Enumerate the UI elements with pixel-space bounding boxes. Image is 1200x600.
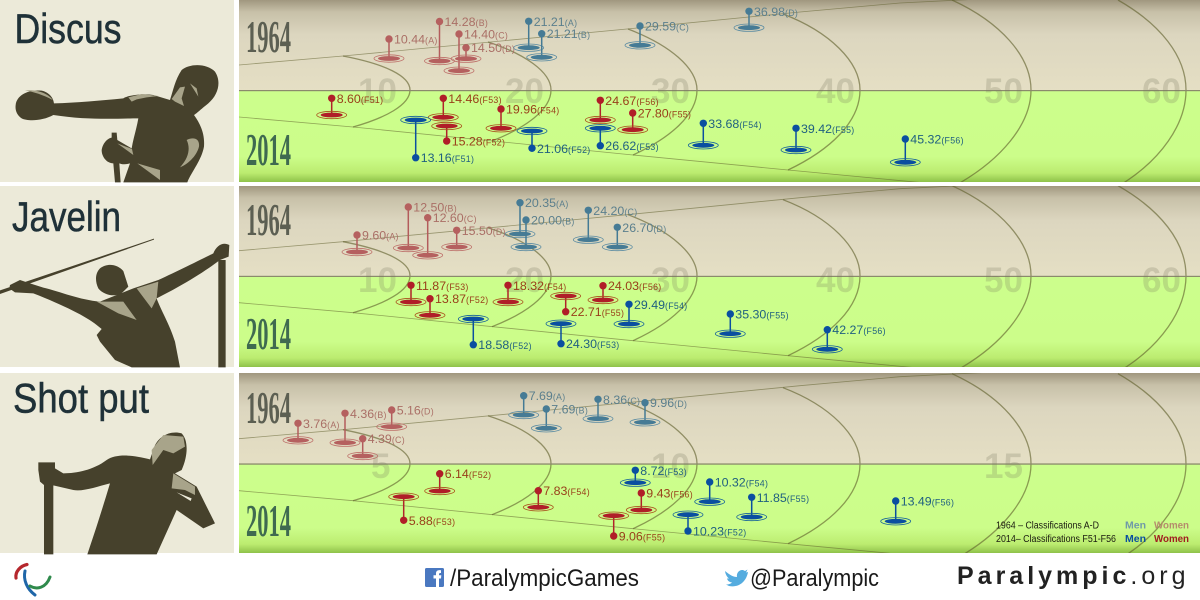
pin 14.28 B: 14.28(B) xyxy=(444,15,488,29)
legend: 1964 – Classifications A-D xyxy=(996,520,1099,532)
pin 20.35 A: 20.35(A) xyxy=(525,196,569,210)
pin 35.30 F55 xyxy=(715,308,789,337)
pin 3.76 A xyxy=(283,417,340,444)
pin 24.20 C: 24.20(C) xyxy=(593,204,637,218)
pin 45.32 F56 xyxy=(890,132,964,166)
distance markers: 15 xyxy=(984,447,1023,486)
legend: 2014– Classifications F51-F56 xyxy=(996,534,1116,545)
pin 14.50 D: 14.50(D) xyxy=(471,41,515,55)
pin 24.20 C xyxy=(573,204,637,243)
panel: javelin results track xyxy=(239,184,1200,376)
pin 9.60 A xyxy=(342,228,399,256)
pin 3.76 A: 3.76(A) xyxy=(303,417,340,431)
pin 10.32 F54: 10.32(F54) xyxy=(715,476,768,490)
pin 11.85 F55: 11.85(F55) xyxy=(757,491,809,505)
pin 5.16 D xyxy=(377,404,434,430)
pin 24.67 F56 xyxy=(585,94,659,124)
pin 10.44 A: 10.44(A) xyxy=(394,32,438,46)
distance markers: 20 xyxy=(505,72,544,111)
pin 8.72 F53 xyxy=(620,464,687,486)
distance markers: 10 xyxy=(651,447,690,486)
legend: Men xyxy=(1125,520,1146,532)
distance markers: 60 xyxy=(1142,261,1181,300)
pin 7.69 A: 7.69(A) xyxy=(529,389,565,403)
pin 12.50 B xyxy=(393,200,457,252)
pin 9.60 A: 9.60(A) xyxy=(362,228,399,242)
pin 29.49 F54: 29.49(F54) xyxy=(634,298,688,312)
distance markers: 50 xyxy=(984,72,1023,111)
distance markers: 60 xyxy=(1142,72,1181,111)
pin 10.23 F52 xyxy=(673,511,747,538)
pin 39.42 F55: 39.42(F55) xyxy=(801,122,855,136)
pin 26.70 D xyxy=(602,221,666,251)
pin 20.00 B xyxy=(511,214,575,251)
pin 11.87 F53: 11.87(F53) xyxy=(416,279,469,293)
pin 33.68 F54 xyxy=(688,117,762,149)
pin 10.44 A xyxy=(374,32,438,62)
pin 8.36 C xyxy=(583,393,640,422)
pin 8.60 F51 xyxy=(317,92,383,119)
pin 9.96 D: 9.96(D) xyxy=(650,396,687,410)
pin 15.50 D xyxy=(442,224,506,251)
pin 13.87 F52 xyxy=(415,292,489,319)
footer xyxy=(16,562,1190,595)
pin 9.06 F55: 9.06(F55) xyxy=(619,530,665,544)
twitter handle: @Paralympic xyxy=(750,565,879,592)
facebook handle: /ParalympicGames xyxy=(450,565,639,592)
heading: Discus: Discus xyxy=(14,5,122,52)
distance markers: 40 xyxy=(816,261,855,300)
panel: shot put athlete xyxy=(0,373,234,554)
pin 15.28 F52: 15.28(F52) xyxy=(452,134,505,148)
pin 5.88 F53: 5.88(F53) xyxy=(409,514,455,528)
pin 21.06 F52: 21.06(F52) xyxy=(537,142,591,156)
pin 13.49 F56: 13.49(F56) xyxy=(901,494,954,508)
pin 29.49 F54 xyxy=(614,298,688,328)
panel: discus athlete xyxy=(0,0,234,182)
pin 18.32 F54 xyxy=(493,279,567,306)
pin 4.39 C xyxy=(348,432,405,460)
pin 20.35 A xyxy=(505,196,569,238)
pin 9.43 F56: 9.43(F56) xyxy=(646,486,693,500)
heading: Javelin: Javelin xyxy=(12,193,121,240)
distance markers: 10 xyxy=(358,261,397,300)
pin 29.59 C xyxy=(625,20,689,49)
pin 27.80 F55 xyxy=(618,106,691,133)
icon: shot putter silhouette xyxy=(38,432,215,554)
pin 14.40 C: 14.40(C) xyxy=(464,28,508,42)
panel: discus results track: 2014 xyxy=(246,124,291,175)
pin 12.60 C: 12.60(C) xyxy=(433,211,477,225)
pin 9.96 D xyxy=(630,396,687,426)
legend xyxy=(996,520,1189,545)
panel: javelin results track: 1964 xyxy=(246,194,291,245)
pin 42.27 F56 xyxy=(812,323,886,353)
icon: Paralympic agitos logo xyxy=(16,564,50,595)
icon: Twitter bird xyxy=(725,570,748,586)
pin 36.98 D xyxy=(734,5,798,31)
pin 7.69 A xyxy=(509,389,565,419)
pin 18.58 F52 xyxy=(458,315,532,352)
pin 21.21 A xyxy=(514,15,577,51)
pin 26.70 D: 26.70(D) xyxy=(622,221,666,235)
distance markers: 30 xyxy=(651,261,690,300)
panel: shot put results track: 1964 xyxy=(246,382,291,433)
distance markers xyxy=(358,72,1181,111)
pin 15.50 D: 15.50(D) xyxy=(462,224,506,238)
pin 13.16 F51: 13.16(F51) xyxy=(421,151,474,165)
pin 5.88 F53 xyxy=(389,493,455,528)
pin 29.59 C: 29.59(C) xyxy=(645,20,689,34)
panel: discus results track xyxy=(239,0,1200,190)
distance markers: 30 xyxy=(651,72,690,111)
panel: javelin results track: 2014 xyxy=(246,308,291,359)
pin 7.83 F54: 7.83(F54) xyxy=(543,484,590,498)
pin 14.46 F53: 14.46(F53) xyxy=(448,92,502,106)
pin 36.98 D: 36.98(D) xyxy=(754,5,798,19)
pin 26.62 F53: 26.62(F53) xyxy=(605,139,659,153)
pin 12.50 B: 12.50(B) xyxy=(413,200,457,214)
pin 4.36 B xyxy=(330,407,387,446)
panel: discus results track: 1964 xyxy=(246,11,291,62)
pin 26.62 F53 xyxy=(585,125,659,153)
pin 42.27 F56: 42.27(F56) xyxy=(832,323,886,337)
pin 5.16 D: 5.16(D) xyxy=(397,404,434,418)
website: Paralympic.org xyxy=(957,562,1190,590)
icon: javelin thrower silhouette xyxy=(0,239,229,367)
pin 15.28 F52 xyxy=(432,122,505,148)
pin 18.58 F52: 18.58(F52) xyxy=(478,338,532,352)
pin 33.68 F54: 33.68(F54) xyxy=(708,117,762,131)
panel: shot put results track: 2014 xyxy=(246,495,291,546)
pin 13.87 F52: 13.87(F52) xyxy=(435,292,489,306)
icon: Facebook xyxy=(425,568,444,587)
pin 35.30 F55: 35.30(F55) xyxy=(735,308,789,322)
pin 21.21 A: 21.21(A) xyxy=(534,15,577,29)
icon: discus thrower silhouette xyxy=(16,65,218,182)
pin 14.28 B xyxy=(424,15,488,65)
pin 24.03 F56 xyxy=(588,279,662,304)
distance markers xyxy=(371,447,1023,486)
pin 7.69 B xyxy=(531,402,588,432)
pin 9.43 F56 xyxy=(626,486,693,514)
pin 18.32 F54: 18.32(F54) xyxy=(513,279,567,293)
pin 27.80 F55: 27.80(F55) xyxy=(638,106,691,120)
pin 11.85 F55 xyxy=(737,491,809,521)
legend: Men xyxy=(1125,533,1146,545)
pin 7.83 F54 xyxy=(523,484,590,511)
pin 13.49 F56 xyxy=(881,494,954,525)
pin 8.72 F53: 8.72(F53) xyxy=(640,464,687,478)
distance markers: 20 xyxy=(505,261,544,300)
pin 6.14 F52: 6.14(F52) xyxy=(445,467,491,481)
pin 24.67 F56: 24.67(F56) xyxy=(605,94,659,108)
pin 11.87 F53 xyxy=(396,279,469,306)
pin 14.50 D xyxy=(451,41,515,62)
pin 4.39 C: 4.39(C) xyxy=(368,432,405,446)
legend: Women xyxy=(1154,520,1189,532)
pin 14.46 F53 xyxy=(428,92,502,121)
pin 14.40 C xyxy=(444,28,508,74)
heading: Shot put: Shot put xyxy=(13,374,149,422)
pin 8.36 C: 8.36(C) xyxy=(603,393,640,407)
pin 22.71 F55 xyxy=(551,292,624,319)
panel: javelin athlete xyxy=(0,186,234,367)
distance markers: 40 xyxy=(816,72,855,111)
distance markers: 5 xyxy=(371,447,390,486)
pin 24.03 F56: 24.03(F56) xyxy=(608,279,662,293)
pin 10.23 F52: 10.23(F52) xyxy=(693,524,747,538)
pin 45.32 F56: 45.32(F56) xyxy=(910,132,964,146)
pin 22.71 F55: 22.71(F55) xyxy=(571,305,624,319)
distance markers: 50 xyxy=(984,261,1023,300)
pin 7.69 B: 7.69(B) xyxy=(551,402,588,416)
pin 10.32 F54 xyxy=(695,476,768,505)
pin 9.06 F55 xyxy=(599,512,665,544)
pin 21.21 B: 21.21(B) xyxy=(547,27,590,41)
pin 24.30 F53: 24.30(F53) xyxy=(566,337,620,351)
pin 21.06 F52 xyxy=(517,127,591,156)
distance markers: 10 xyxy=(358,72,397,111)
pin 24.30 F53 xyxy=(546,320,620,351)
pin 8.60 F51: 8.60(F51) xyxy=(337,92,383,106)
legend: Women xyxy=(1154,533,1189,545)
pin 6.14 F52 xyxy=(425,467,491,495)
distance markers xyxy=(358,261,1181,300)
pin 19.96 F54 xyxy=(486,102,560,132)
panel: shot put results track xyxy=(239,372,1200,564)
pin 13.16 F51 xyxy=(401,116,474,165)
pin 21.21 B xyxy=(527,27,590,61)
pin 12.60 C xyxy=(413,211,477,259)
pin 39.42 F55 xyxy=(781,122,855,154)
pin 20.00 B: 20.00(B) xyxy=(531,214,575,228)
pin 4.36 B: 4.36(B) xyxy=(350,407,387,421)
pin 19.96 F54: 19.96(F54) xyxy=(506,102,560,116)
